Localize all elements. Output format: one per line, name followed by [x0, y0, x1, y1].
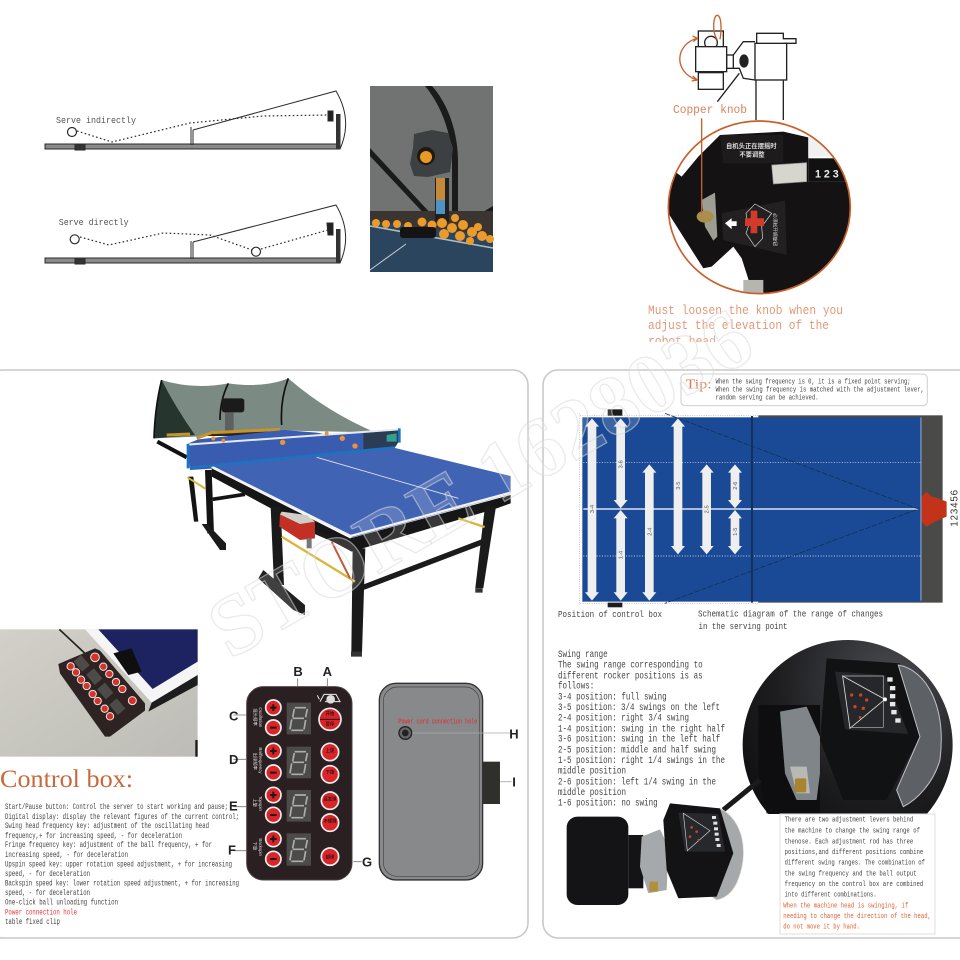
rotated key labels: Oscillation — [258, 707, 263, 728]
function buttons — [319, 708, 341, 865]
near legs — [271, 507, 284, 585]
text: control box key descriptions: Backspin speed key: lower rotation speed adjustment, + for increasing — [5, 878, 239, 888]
table top far half — [187, 430, 397, 470]
caption: schematic diagram: in the serving point — [698, 621, 788, 632]
text: control box key descriptions: speed, - for deceleration — [5, 888, 90, 898]
rotated key labels: 出球频率 — [251, 753, 258, 771]
control panel front diagram — [228, 664, 372, 880]
robot — [207, 398, 280, 436]
text: control box key descriptions: table fixed clip — [5, 917, 60, 927]
text: knob warning: Must loosen the knob when you — [648, 303, 843, 318]
caption: schematic diagram — [698, 608, 883, 632]
text box: adjustment levers: into different combinations. — [785, 892, 877, 900]
arrow position labels — [590, 460, 739, 559]
table net — [187, 429, 399, 468]
function buttons: 下旋 — [326, 769, 335, 776]
letter labels back: H — [509, 726, 519, 741]
panel: swing range — [543, 370, 960, 938]
text: control box key descriptions: One-click ball unloading function — [5, 898, 118, 908]
power cord label: Power cord connection hole — [398, 718, 477, 726]
text: knob warning: adjust the elevation of the — [648, 318, 829, 333]
red control box on table — [279, 512, 315, 548]
text: control box key descriptions: Fringe frequency key: adjustment of the ball frequency, + for — [5, 840, 212, 850]
letter labels front: G — [362, 854, 372, 869]
table top near half — [190, 448, 511, 538]
arrow position labels: 2-5 — [705, 505, 711, 513]
text box: adjustment levers: There are two adjustment levers behind — [785, 817, 913, 825]
logo — [317, 694, 340, 702]
text: control box key descriptions: speed, - for deceleration — [5, 869, 90, 879]
arrow position labels: 3-4 — [590, 505, 596, 513]
text: swing range list — [558, 649, 725, 809]
diagram: serve directly — [45, 205, 346, 264]
mounted control box — [58, 648, 145, 737]
photo: table with robot and net — [154, 378, 511, 657]
position numbers: 123456 — [949, 490, 960, 527]
photo: swing head close-up — [722, 640, 953, 814]
text: swing range list: different rocker positions is as — [558, 670, 703, 681]
red serving fan — [922, 492, 947, 527]
letter labels front: F — [228, 843, 236, 858]
text box: adjustment levers: When the machine head is swinging, if — [783, 902, 908, 910]
arrow position labels: 3-5 — [676, 482, 682, 490]
text: control box key descriptions: Start/Pause button: Control the server to start working and pause; — [5, 802, 228, 812]
rotated key labels — [251, 707, 263, 856]
text: swing range list: Swing range — [558, 649, 608, 660]
tip box — [681, 374, 927, 406]
function buttons: 高发球 — [323, 796, 337, 803]
text: swing range list: 3-6 position: swing in the left half — [558, 734, 720, 745]
text: swing range list: 3-5 position: 3/4 swings on the left — [558, 702, 720, 713]
arrow position labels: 1-5 — [733, 528, 739, 536]
text: swing range list: middle position — [558, 766, 626, 777]
rotated key labels: 摇头频率 — [251, 708, 258, 726]
photo: knob close-up circle: 自机头正在摆摇时 — [726, 141, 777, 150]
text: control box key descriptions: Swing head frequency key: adjustment of the oscillating head — [5, 821, 209, 831]
text: swing range list: 2-5 position: middle and half swing — [558, 744, 716, 755]
text box: adjustment levers: frequency on the control box are combined — [785, 881, 923, 889]
text: swing range list: follows: — [558, 681, 594, 692]
photo: knob close-up circle: 1 2 3 — [815, 168, 839, 180]
photo: knob close-up circle: 必须松开铜旋钮 — [771, 213, 778, 246]
caption: schematic diagram: Schematic diagram of the range of changes — [698, 608, 883, 620]
far legs and frame — [188, 477, 198, 522]
function buttons: 不规则 — [323, 818, 336, 825]
letter labels front: D — [229, 752, 238, 767]
text: knob warning — [648, 304, 842, 342]
letter labels front: B — [293, 664, 303, 679]
rotated key labels: 下旋 — [251, 842, 258, 851]
text: control box key descriptions — [5, 802, 239, 927]
letter labels front: C — [229, 708, 239, 723]
arrow position labels: 1-4 — [619, 551, 625, 559]
ball net cage — [154, 378, 375, 438]
text box: adjustment levers: the machine to change the swing range of — [785, 828, 920, 836]
text: swing range list: 3-4 position: full swing — [558, 691, 667, 702]
text: swing range list: 1-4 position: swing in the right half — [558, 723, 725, 734]
letter labels front — [228, 664, 372, 869]
table apron — [212, 468, 511, 552]
text: swing range list: 1-6 position: no swing — [558, 798, 658, 809]
text box: adjustment levers: the swing frequency and the ball output — [785, 870, 917, 878]
balls — [211, 431, 358, 449]
photo: control box mounted on table — [0, 629, 198, 757]
panel: control box — [0, 370, 528, 938]
text: knob warning: robot head — [648, 334, 716, 349]
text box: adjustment levers: do not move it by hand. — [783, 924, 860, 932]
text: control box key descriptions: Upspin speed key: upper rotation speed adjustment, + for increasing — [5, 860, 232, 870]
label: copper knob: Copper knob — [673, 103, 747, 117]
photo: knob close-up circle: 不要调整 — [739, 150, 765, 159]
label: serve directly: Serve directly — [59, 217, 129, 228]
text: control box key descriptions: Digital display: display the relevant figures of the current control; — [5, 812, 239, 822]
watermark: STORE 1628036 — [192, 290, 768, 676]
tip box: Tip: — [686, 377, 712, 392]
letter labels back: I — [512, 775, 516, 790]
callout lines — [233, 678, 362, 862]
heading: control box: Control box: — [0, 766, 133, 793]
rotated key labels: Backspin — [258, 838, 263, 856]
caption: position of control box: Position of control box — [558, 609, 662, 620]
tip box: When the swing frequency is 0, it is a fixed point serving; — [716, 379, 911, 387]
photo: knob close-up circle — [668, 118, 852, 294]
photo: robot head in net — [370, 86, 494, 272]
arrow position labels: 2-4 — [647, 528, 653, 536]
text box: adjustment levers: positions,and different positions combine — [785, 849, 923, 857]
function buttons: 暂停 — [326, 720, 335, 727]
control panel back diagram — [379, 683, 519, 880]
text box: adjustment levers — [780, 814, 935, 934]
function buttons: 卸球 — [326, 853, 335, 860]
rotated key labels: Ballfrequency — [258, 747, 263, 774]
text: swing range list: middle position — [558, 787, 626, 798]
function buttons: 上旋 — [326, 747, 335, 754]
text: control box key descriptions: increasing speed, - for deceleration — [5, 850, 128, 860]
connector line between photos — [723, 780, 760, 810]
digit displays — [287, 703, 311, 866]
arrow position labels: 2-6 — [733, 482, 739, 490]
diagram: serve indirectly — [45, 91, 346, 150]
table top-view diagram — [579, 409, 960, 607]
letter labels back — [509, 726, 519, 790]
text box: adjustment levers: thenose. Each adjustment rod has three — [785, 838, 913, 846]
text: control box key descriptions: frequency,+ for increasing speed, - for deceleration — [5, 831, 182, 841]
double arrows — [585, 418, 742, 601]
text: swing range list: The swing range corresponding to — [558, 660, 703, 671]
text: swing range list: 2-4 position: right 3/4 swing — [558, 713, 689, 724]
text: swing range list: 1-5 position: right 1/4 swings in the — [558, 755, 725, 766]
tip box: random serving can be achieved. — [716, 394, 819, 402]
photo: swing head full view — [567, 803, 743, 905]
arrow position labels: 3-6 — [619, 460, 625, 468]
rotated key labels: 上旋 — [251, 798, 258, 808]
letter labels front: A — [323, 664, 333, 679]
text: swing range list: 2-6 position: left 1/4 swing in the — [558, 776, 716, 787]
text: control box key descriptions: Power connection hole — [5, 908, 77, 918]
letter labels front: E — [229, 799, 238, 814]
plus and minus buttons — [266, 700, 281, 867]
label: serve indirectly: Serve indirectly — [56, 115, 136, 126]
function buttons: 开始 — [326, 710, 335, 717]
diagram: copper knob line drawing — [680, 15, 796, 120]
rotated key labels: Topspin — [258, 796, 263, 811]
